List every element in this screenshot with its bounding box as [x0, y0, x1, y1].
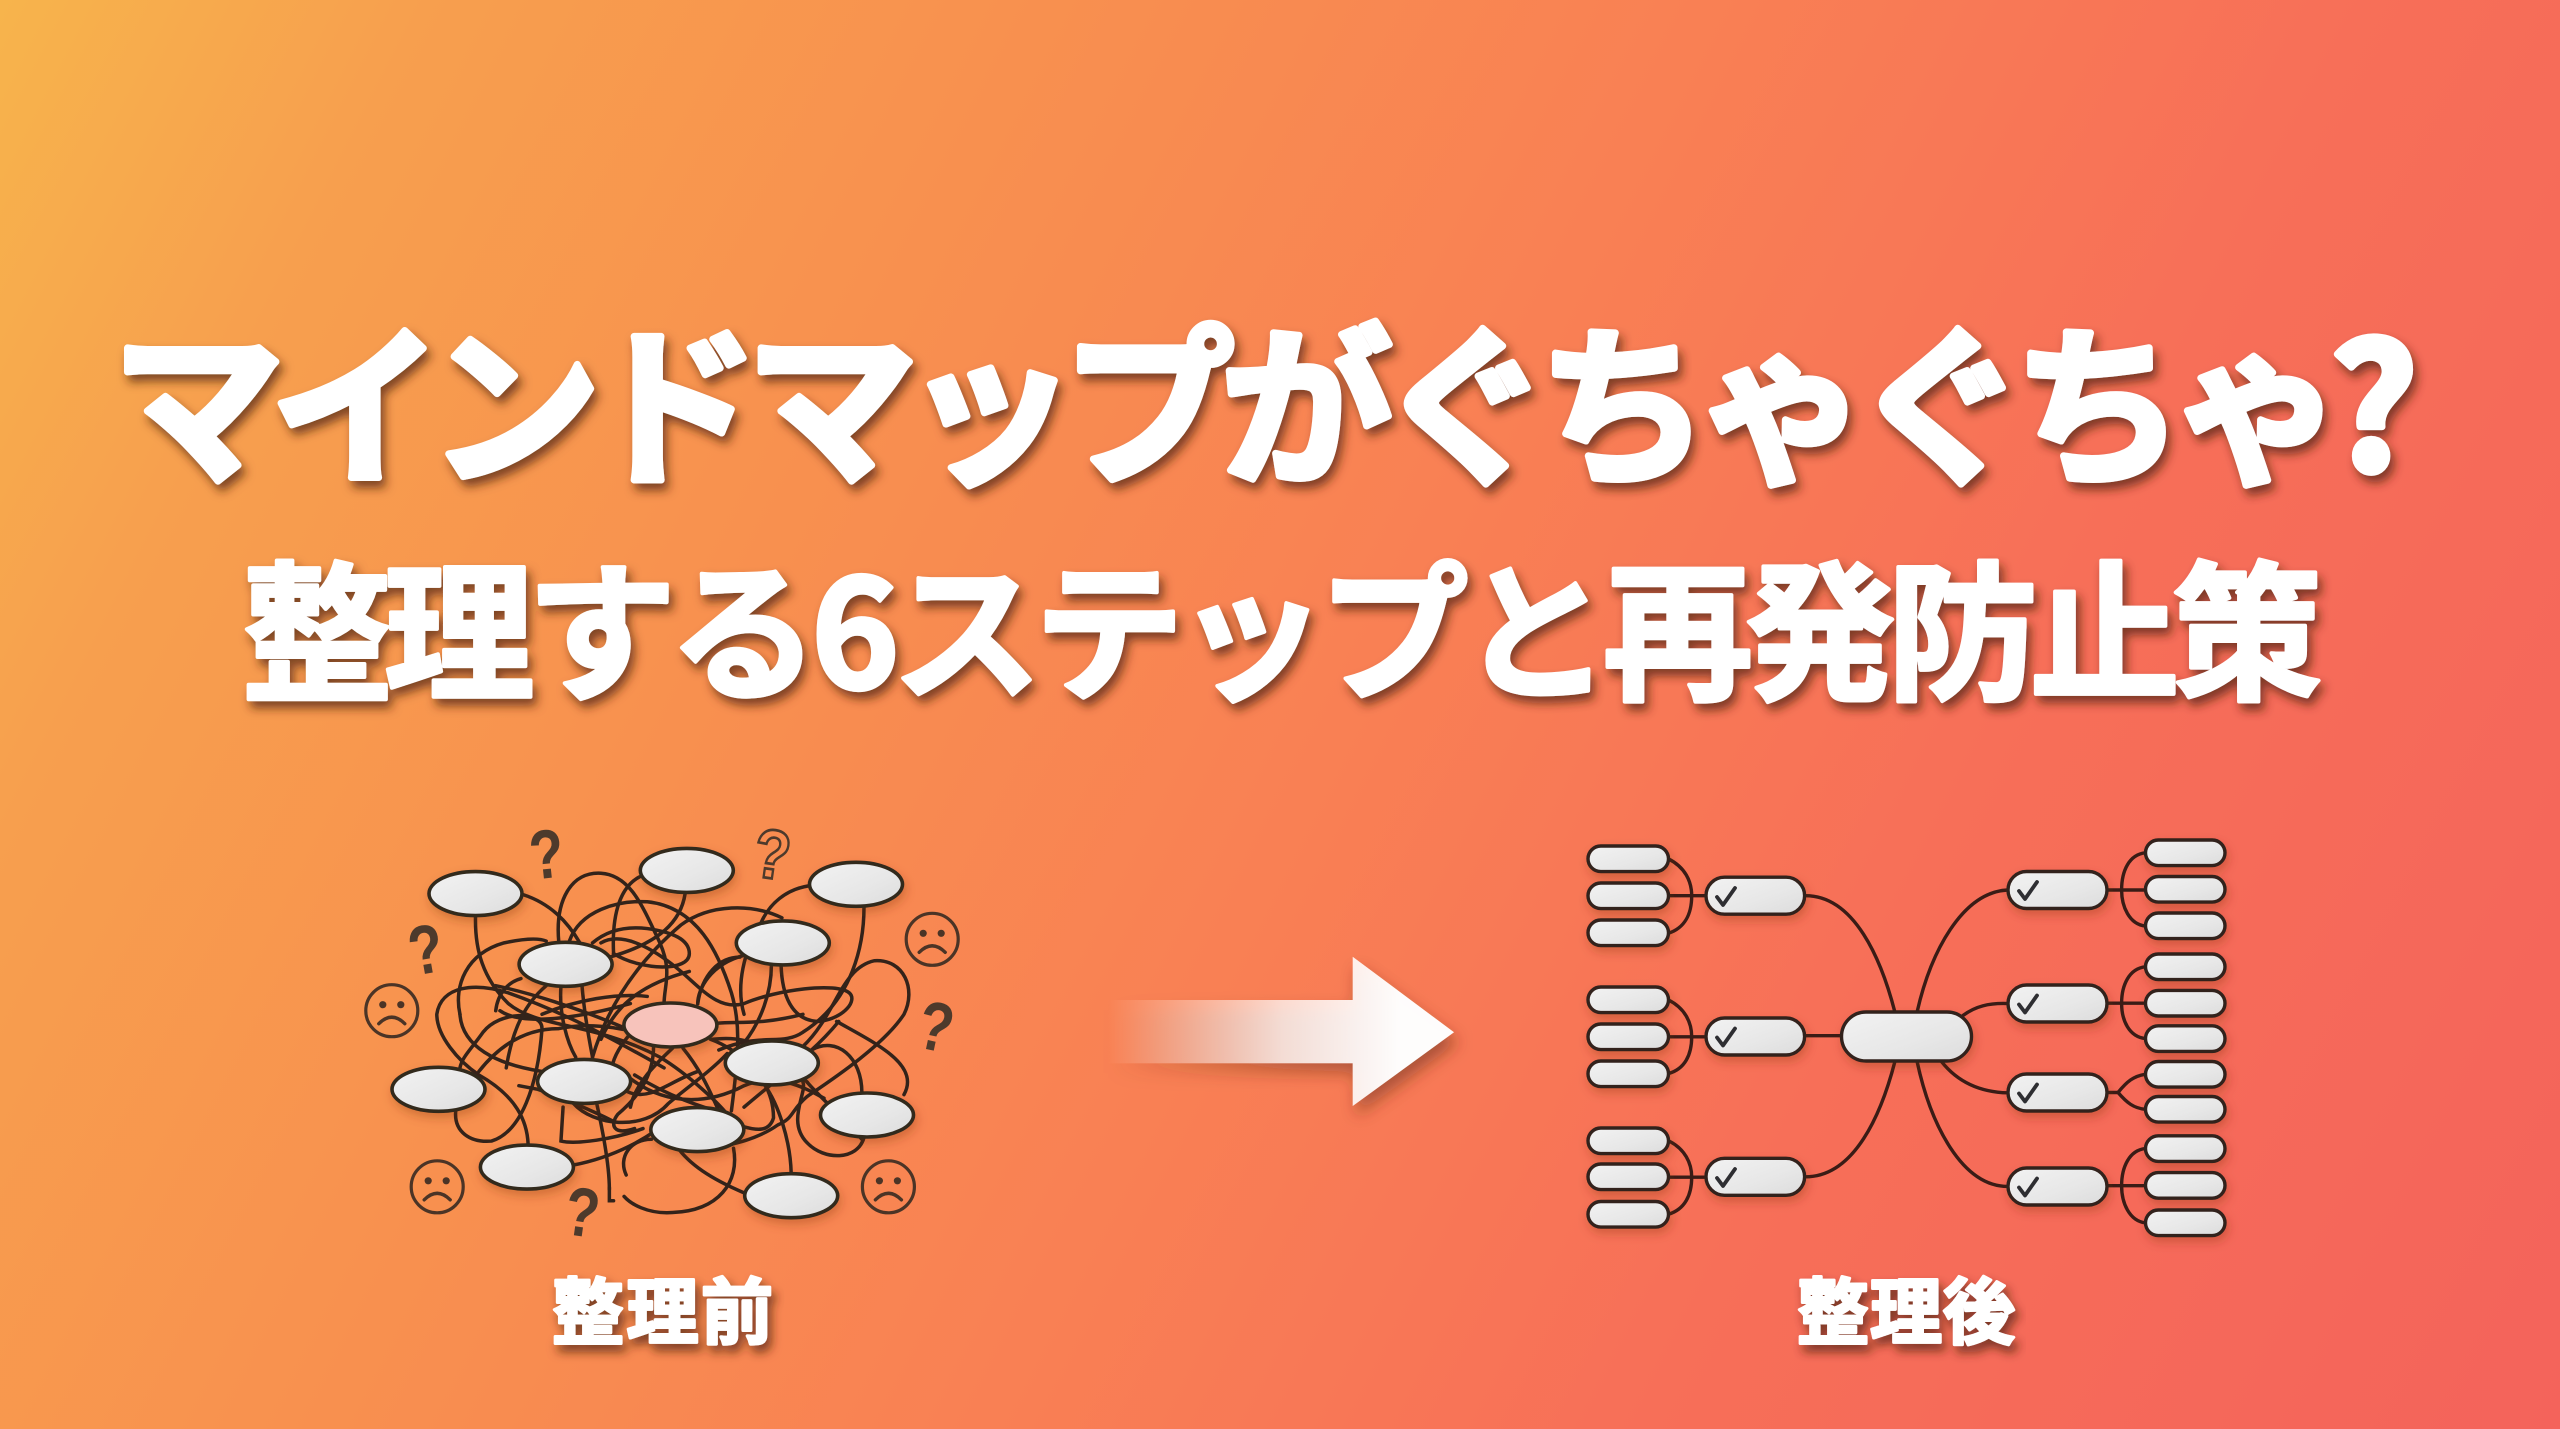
connecting branches — [1668, 853, 2145, 1223]
subtitle: 整理する6ステップと再発防止策 — [242, 515, 2322, 732]
arrow: before to after — [1108, 957, 1454, 1106]
icons: question marks: ? — [402, 909, 450, 991]
icons: sad faces — [366, 913, 958, 1213]
central pink node — [624, 1003, 717, 1047]
icons: question marks: ? — [911, 986, 961, 1069]
icons: question marks: ? — [560, 1173, 605, 1254]
panel: tangled mind map before organizing — [366, 814, 961, 1254]
icons: question marks: ? — [749, 814, 796, 895]
check icons — [1717, 882, 2037, 1196]
tangled connecting lines — [437, 873, 909, 1213]
oval nodes — [392, 848, 914, 1218]
label: after: 整理後 — [1797, 1254, 2015, 1359]
right leaf nodes — [2146, 840, 2225, 1236]
title: main heading: マインドマップがぐちゃぐちゃ? — [112, 270, 2418, 520]
icons: question marks: ? — [526, 815, 568, 895]
label: before: 整理前 — [552, 1254, 773, 1359]
central node — [1842, 1012, 1972, 1061]
icons: question marks — [402, 814, 961, 1254]
branch nodes with checkmarks — [1706, 872, 2107, 1205]
panel: organized mind map after — [1588, 840, 2225, 1236]
left leaf nodes — [1588, 846, 1668, 1227]
